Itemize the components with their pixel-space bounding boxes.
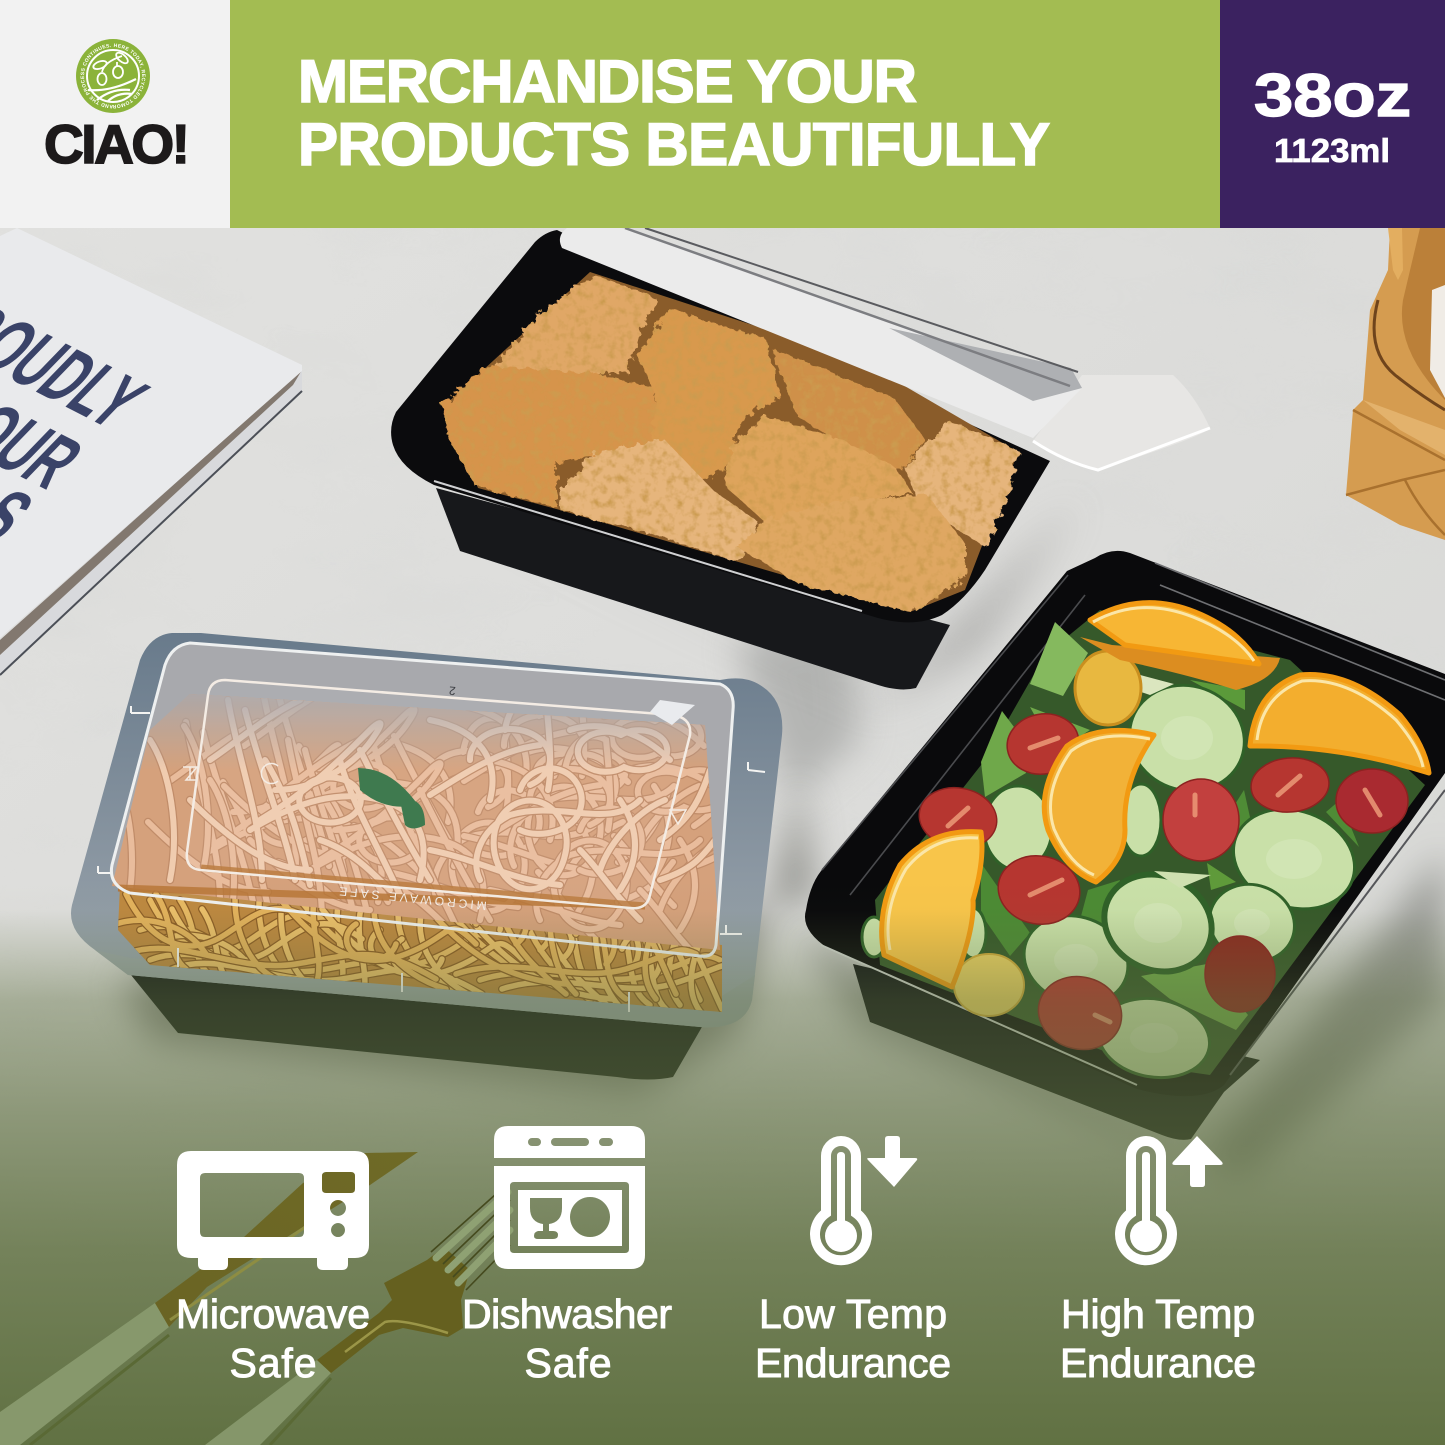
title: MERCHANDISE YOUR (298, 48, 917, 115)
logo badge (76, 39, 150, 113)
embossed lid icons (183, 763, 686, 824)
cucumber seed centres (1054, 716, 1322, 1053)
container: spaghetti with lid: 2 (448, 683, 456, 698)
capacity oz: 38oz (1254, 62, 1411, 129)
photo: open book (0, 228, 302, 675)
container: spaghetti with lid (71, 633, 815, 1095)
photo: woven basket (1346, 228, 1445, 540)
rim (805, 551, 1445, 1096)
label: Endurance (1060, 1340, 1256, 1386)
raised lid tone (111, 643, 733, 956)
label: Safe (524, 1340, 612, 1386)
label (462, 1291, 672, 1386)
salad floor (875, 610, 1425, 1075)
label: Microwave (176, 1291, 370, 1337)
black tub (436, 488, 950, 689)
feature: dishwasher safe (462, 1126, 672, 1386)
icon: dishwasher (494, 1126, 645, 1269)
lid outlines (111, 643, 733, 956)
header: size badge (1220, 0, 1445, 228)
label: Endurance (755, 1340, 951, 1386)
container: fried chicken with lid (391, 228, 1210, 705)
label: Dishwasher (462, 1291, 672, 1337)
black tub (131, 975, 706, 1080)
chicken pieces (442, 272, 1019, 613)
header: logo panel (0, 0, 230, 228)
label: Safe (230, 1340, 316, 1386)
tomato flesh streaks (948, 738, 1380, 1022)
header: green title band (230, 0, 1220, 228)
sauce ridge (118, 868, 645, 906)
black rim (391, 230, 1050, 622)
orange pith (888, 608, 1423, 950)
icon: microwave (177, 1151, 369, 1270)
label: Low Temp (759, 1291, 947, 1337)
title: PRODUCTS BEAUTIFULLY (298, 111, 1050, 178)
feature: low temp endurance (755, 1136, 951, 1386)
feature: microwave safe (176, 1151, 370, 1386)
title (298, 48, 1050, 178)
icon: thermometer down (815, 1136, 917, 1260)
pale cucumber pieces (1129, 672, 1174, 695)
capacity ml: 1123ml (1274, 132, 1390, 169)
label: High Temp (1061, 1291, 1255, 1337)
clip marks (98, 706, 765, 1012)
shadow (120, 780, 815, 1095)
icon: thermometer up (1120, 1136, 1223, 1260)
label (1060, 1291, 1256, 1386)
fork (205, 1186, 510, 1445)
shadow (800, 850, 1445, 1180)
embossed lid text: MICROWAVE SAFE (339, 884, 487, 913)
shadow (420, 500, 1080, 705)
logo wordmark: CIAO! (44, 113, 190, 175)
lettuce (981, 622, 1359, 1030)
salad ingredients (862, 603, 1429, 1086)
label (755, 1291, 951, 1386)
lid (560, 228, 1210, 470)
orange peel curl (1080, 637, 1280, 690)
label (176, 1291, 370, 1386)
container: salad (800, 551, 1445, 1180)
black tub (853, 964, 1260, 1140)
cucumbers (862, 669, 1369, 1086)
tomatoes (914, 708, 1408, 1059)
orange slices (882, 603, 1429, 987)
green gradient overlay (0, 880, 1445, 1445)
lid outer rim (71, 633, 782, 1027)
lower pasta (118, 887, 722, 1012)
knife (0, 1152, 418, 1445)
yellow tomatoes (1075, 651, 1141, 725)
feature: high temp endurance (1060, 1136, 1256, 1386)
hazy pasta under lid (112, 694, 720, 950)
basil leaf (358, 768, 425, 828)
